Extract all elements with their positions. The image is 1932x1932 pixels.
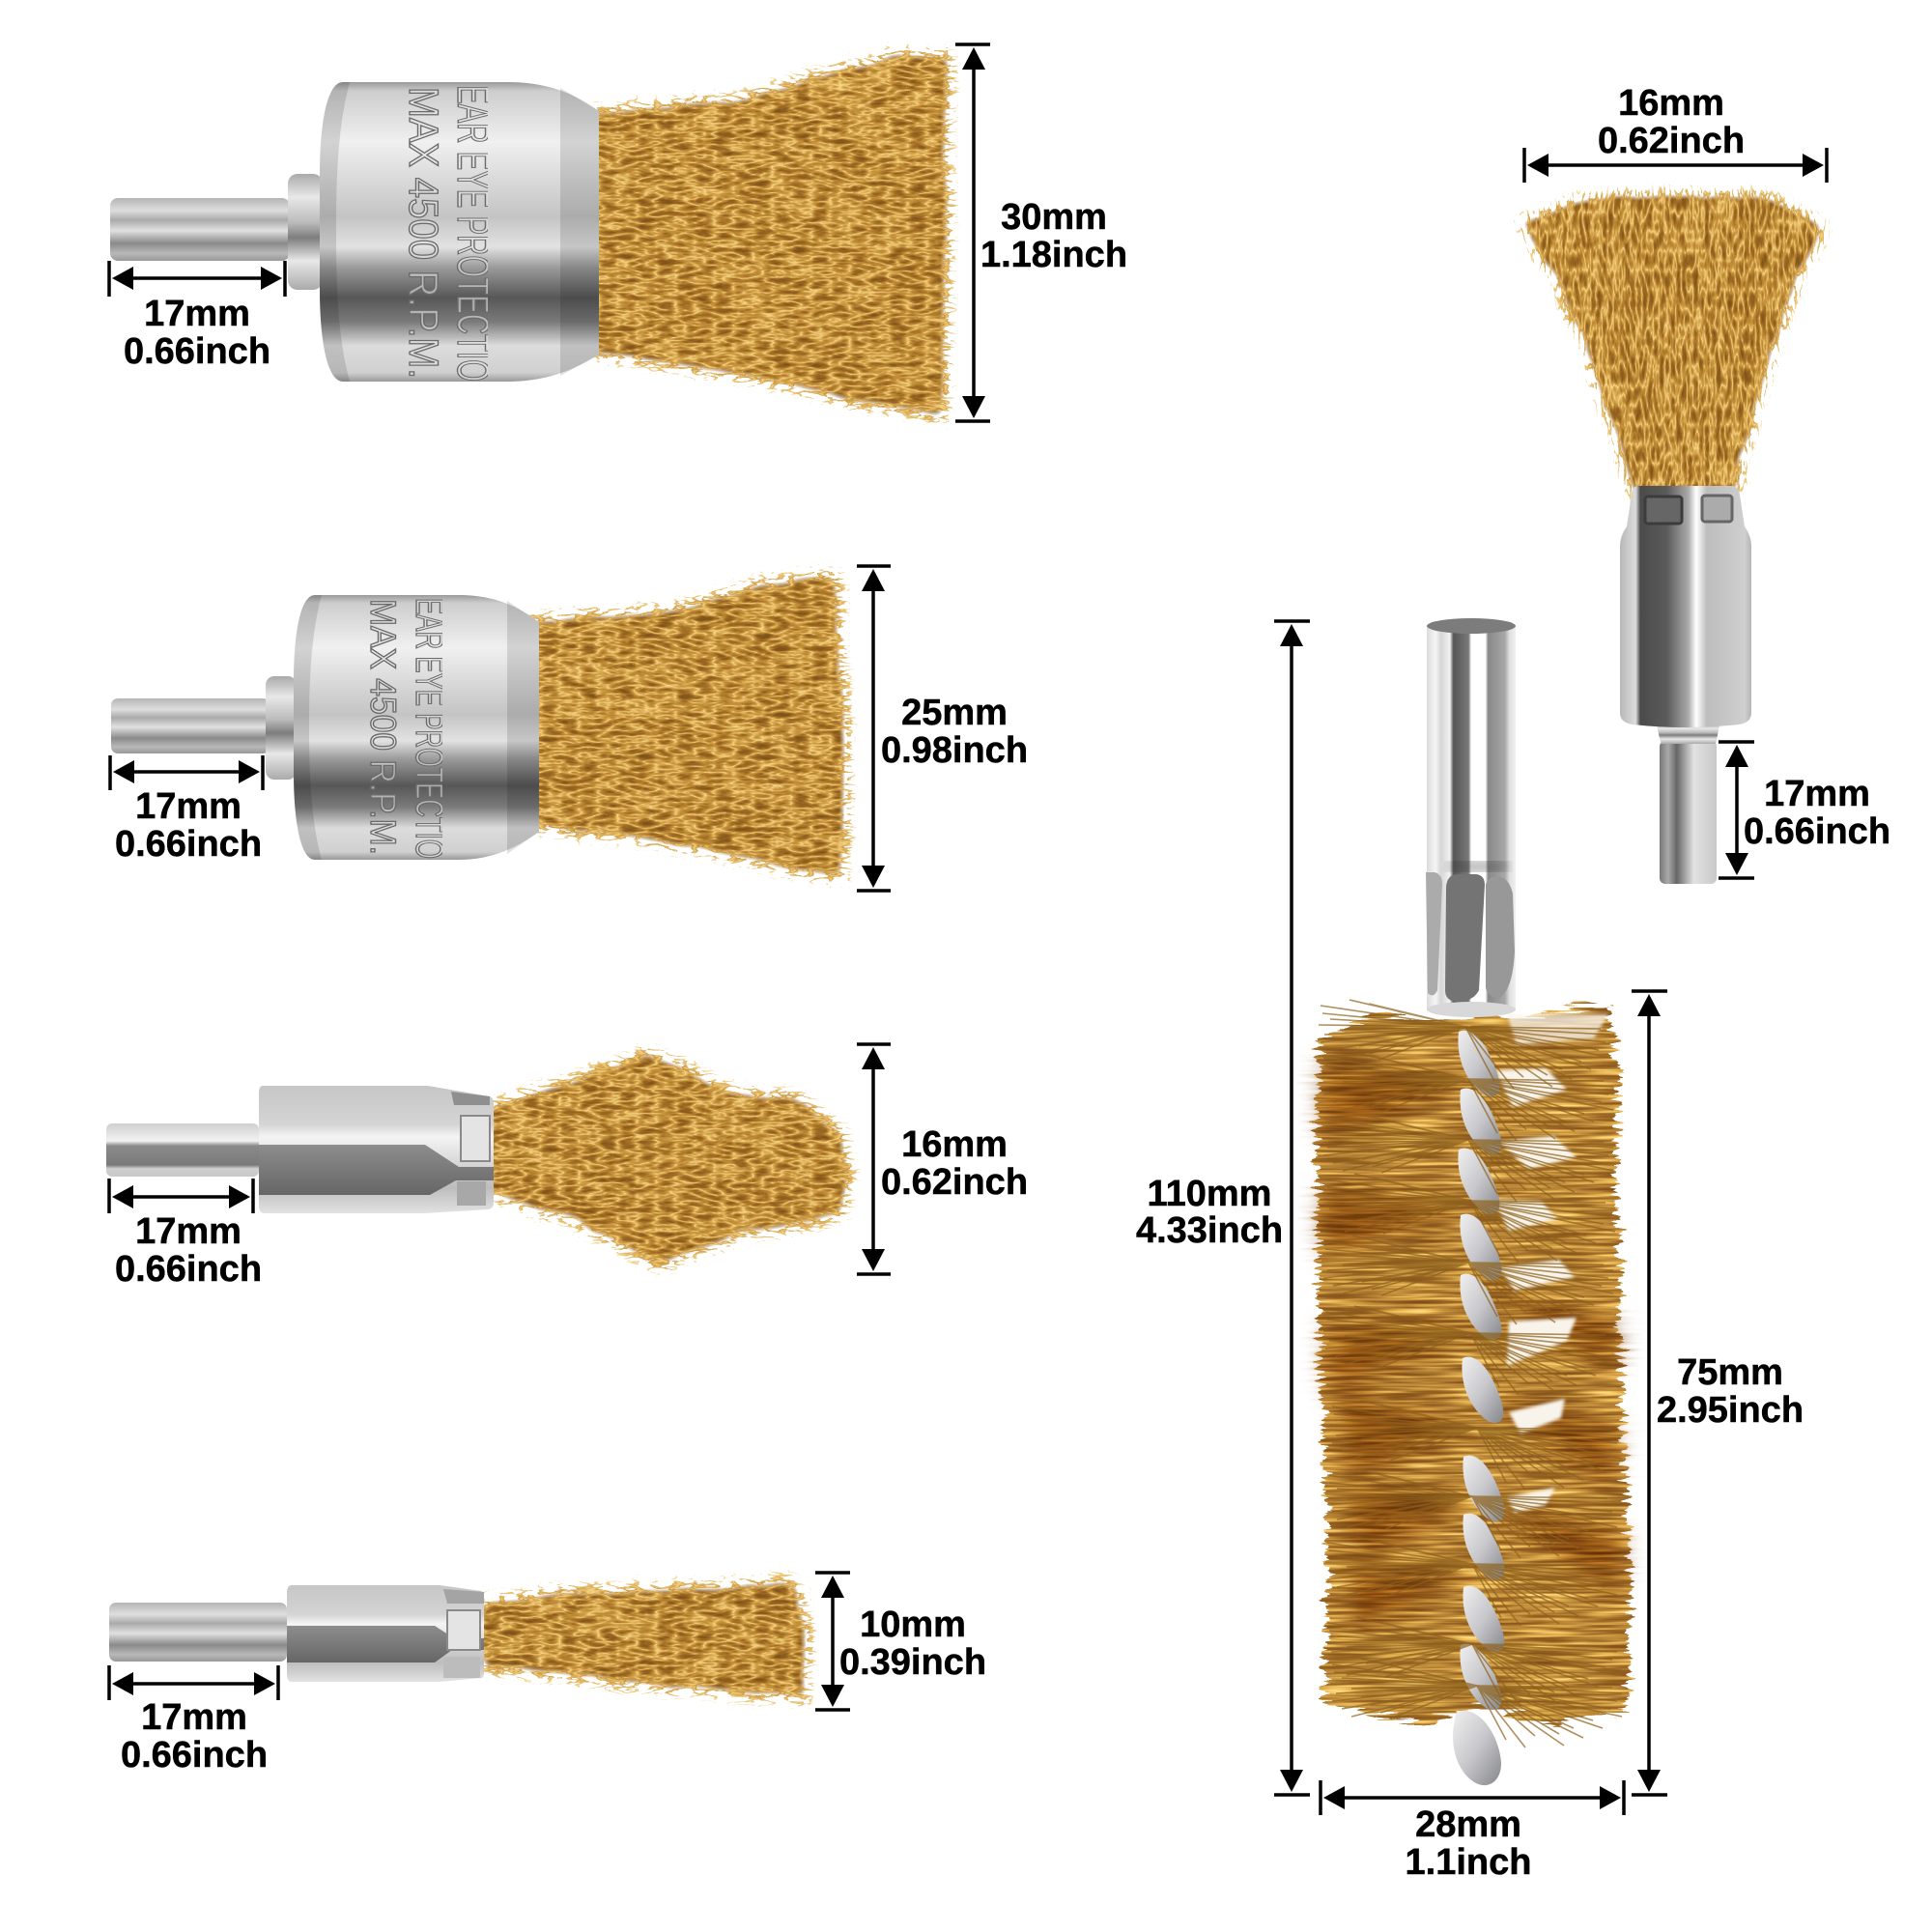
dimension: 75mm bristle length (1632, 991, 1804, 1795)
hex facet middle (1445, 874, 1485, 1002)
dimension: 16mm width: 16mm (1618, 83, 1724, 124)
dimension: 110mm length: 4.33inch (1136, 1210, 1283, 1251)
bottom notch (443, 1657, 480, 1678)
handle shadow (1449, 862, 1507, 871)
body (259, 1086, 494, 1213)
shaft (109, 1603, 287, 1662)
dimension: 16mm height (857, 1044, 1028, 1274)
twisted tip (1453, 1711, 1501, 1785)
dimension: shaft 1: 0.66inch (124, 331, 270, 372)
dimension: 16mm height: 16mm (901, 1124, 1008, 1165)
bottom notch (457, 1181, 486, 1206)
handle top (1427, 618, 1516, 634)
dimension: 10mm height: 10mm (860, 1605, 966, 1645)
hex facet right (1486, 876, 1515, 998)
dimension: shaft 1 (109, 261, 285, 372)
body bevel (320, 82, 599, 382)
hex facet left (1426, 872, 1442, 995)
dimension: 16mm width (1524, 83, 1827, 183)
dimension: 16mm width: 0.62inch (1598, 121, 1745, 161)
body (1620, 486, 1751, 727)
dimension: shaft 3: 0.66inch (115, 1249, 262, 1290)
middle notch (447, 1610, 480, 1650)
bristles (580, 44, 954, 425)
panel: 10mm flat brush (109, 1575, 815, 1706)
shaft (106, 1123, 259, 1177)
dimension: 30mm height: 1.18inch (980, 235, 1127, 275)
dimension: shaft 3: 17mm (135, 1211, 242, 1252)
panel: 16mm pointed brush (106, 1045, 858, 1273)
dimension: shaft 4: 0.66inch (121, 1735, 268, 1776)
body (294, 595, 539, 860)
dimension: 10mm height (815, 1573, 986, 1710)
engraved text: protection: EAR EYE PROTECTIO (448, 85, 498, 382)
dimension: shaft 3 (109, 1179, 262, 1290)
dimension: shaft 4: 17mm (141, 1697, 247, 1738)
shaft (110, 198, 290, 261)
dimension: 25mm height: 0.98inch (881, 730, 1028, 771)
gaps between bristles (1493, 1014, 1608, 1513)
collar (266, 676, 297, 780)
dimension: 75mm bristle length: 75mm (1677, 1352, 1783, 1393)
shaft (111, 698, 270, 753)
dimension: 75mm bristle length: 2.95inch (1657, 1390, 1804, 1431)
middle notch (461, 1116, 490, 1161)
bristles (478, 1045, 858, 1273)
body (287, 1585, 484, 1682)
dimension: shaft 5: 0.66inch (1744, 811, 1890, 852)
dimension: 28mm width: 28mm (1415, 1804, 1521, 1845)
dimension: 30mm height (955, 44, 1127, 421)
right notch (1702, 496, 1732, 522)
dark facet (259, 1145, 494, 1195)
bristles (1509, 187, 1835, 502)
dimension: 30mm height: 30mm (1001, 197, 1107, 238)
shaft (1660, 741, 1717, 884)
engraved text: protection: EAR EYE PROTECTIO (408, 598, 450, 859)
dimension: 25mm height (857, 566, 1028, 891)
bristles (473, 1575, 815, 1706)
twisted wire core (1458, 1031, 1504, 1710)
dimension: shaft 2 (110, 755, 263, 865)
top notch (443, 1589, 484, 1604)
panel: 30mm cup brush (110, 44, 954, 425)
dimension: 110mm length: 110mm (1148, 1174, 1271, 1214)
panel: spiral tube brush (1316, 618, 1631, 1785)
dimension: 10mm height: 0.39inch (839, 1642, 986, 1683)
handle (1427, 626, 1516, 1009)
panel: 25mm cup brush (111, 564, 853, 891)
dimension: shaft 2: 17mm (135, 786, 242, 827)
dimension: shaft 5: 17mm (1764, 774, 1870, 814)
engraved text: rpm: MAX 4500 R.P.M. (400, 87, 446, 379)
dimension: shaft 4 (109, 1665, 278, 1776)
bristle mass (1316, 1005, 1631, 1724)
bristle fans (1319, 1000, 1622, 1747)
top notch (451, 1092, 490, 1105)
dimension: shaft 5 (1719, 742, 1890, 878)
dark facet (287, 1626, 484, 1662)
dimension: 110mm length (1136, 621, 1310, 1795)
engraved text: rpm: MAX 4500 R.P.M. (363, 599, 403, 855)
panel: 16mm flared cup brush (1509, 187, 1835, 884)
left notch (1645, 497, 1682, 524)
dimension: shaft 1: 17mm (144, 294, 250, 334)
bristles (522, 564, 853, 891)
body bevel (294, 595, 539, 860)
dimension: shaft 2: 0.66inch (115, 824, 262, 865)
dimension: 28mm width (1321, 1780, 1624, 1883)
collar (288, 174, 323, 290)
dimension: 25mm height: 25mm (901, 693, 1008, 733)
dimension: 28mm width: 1.1inch (1406, 1842, 1531, 1883)
handle bottom (1427, 1002, 1516, 1017)
neck (1657, 724, 1719, 744)
body (320, 82, 599, 382)
dimension: 16mm height: 0.62inch (881, 1162, 1028, 1203)
